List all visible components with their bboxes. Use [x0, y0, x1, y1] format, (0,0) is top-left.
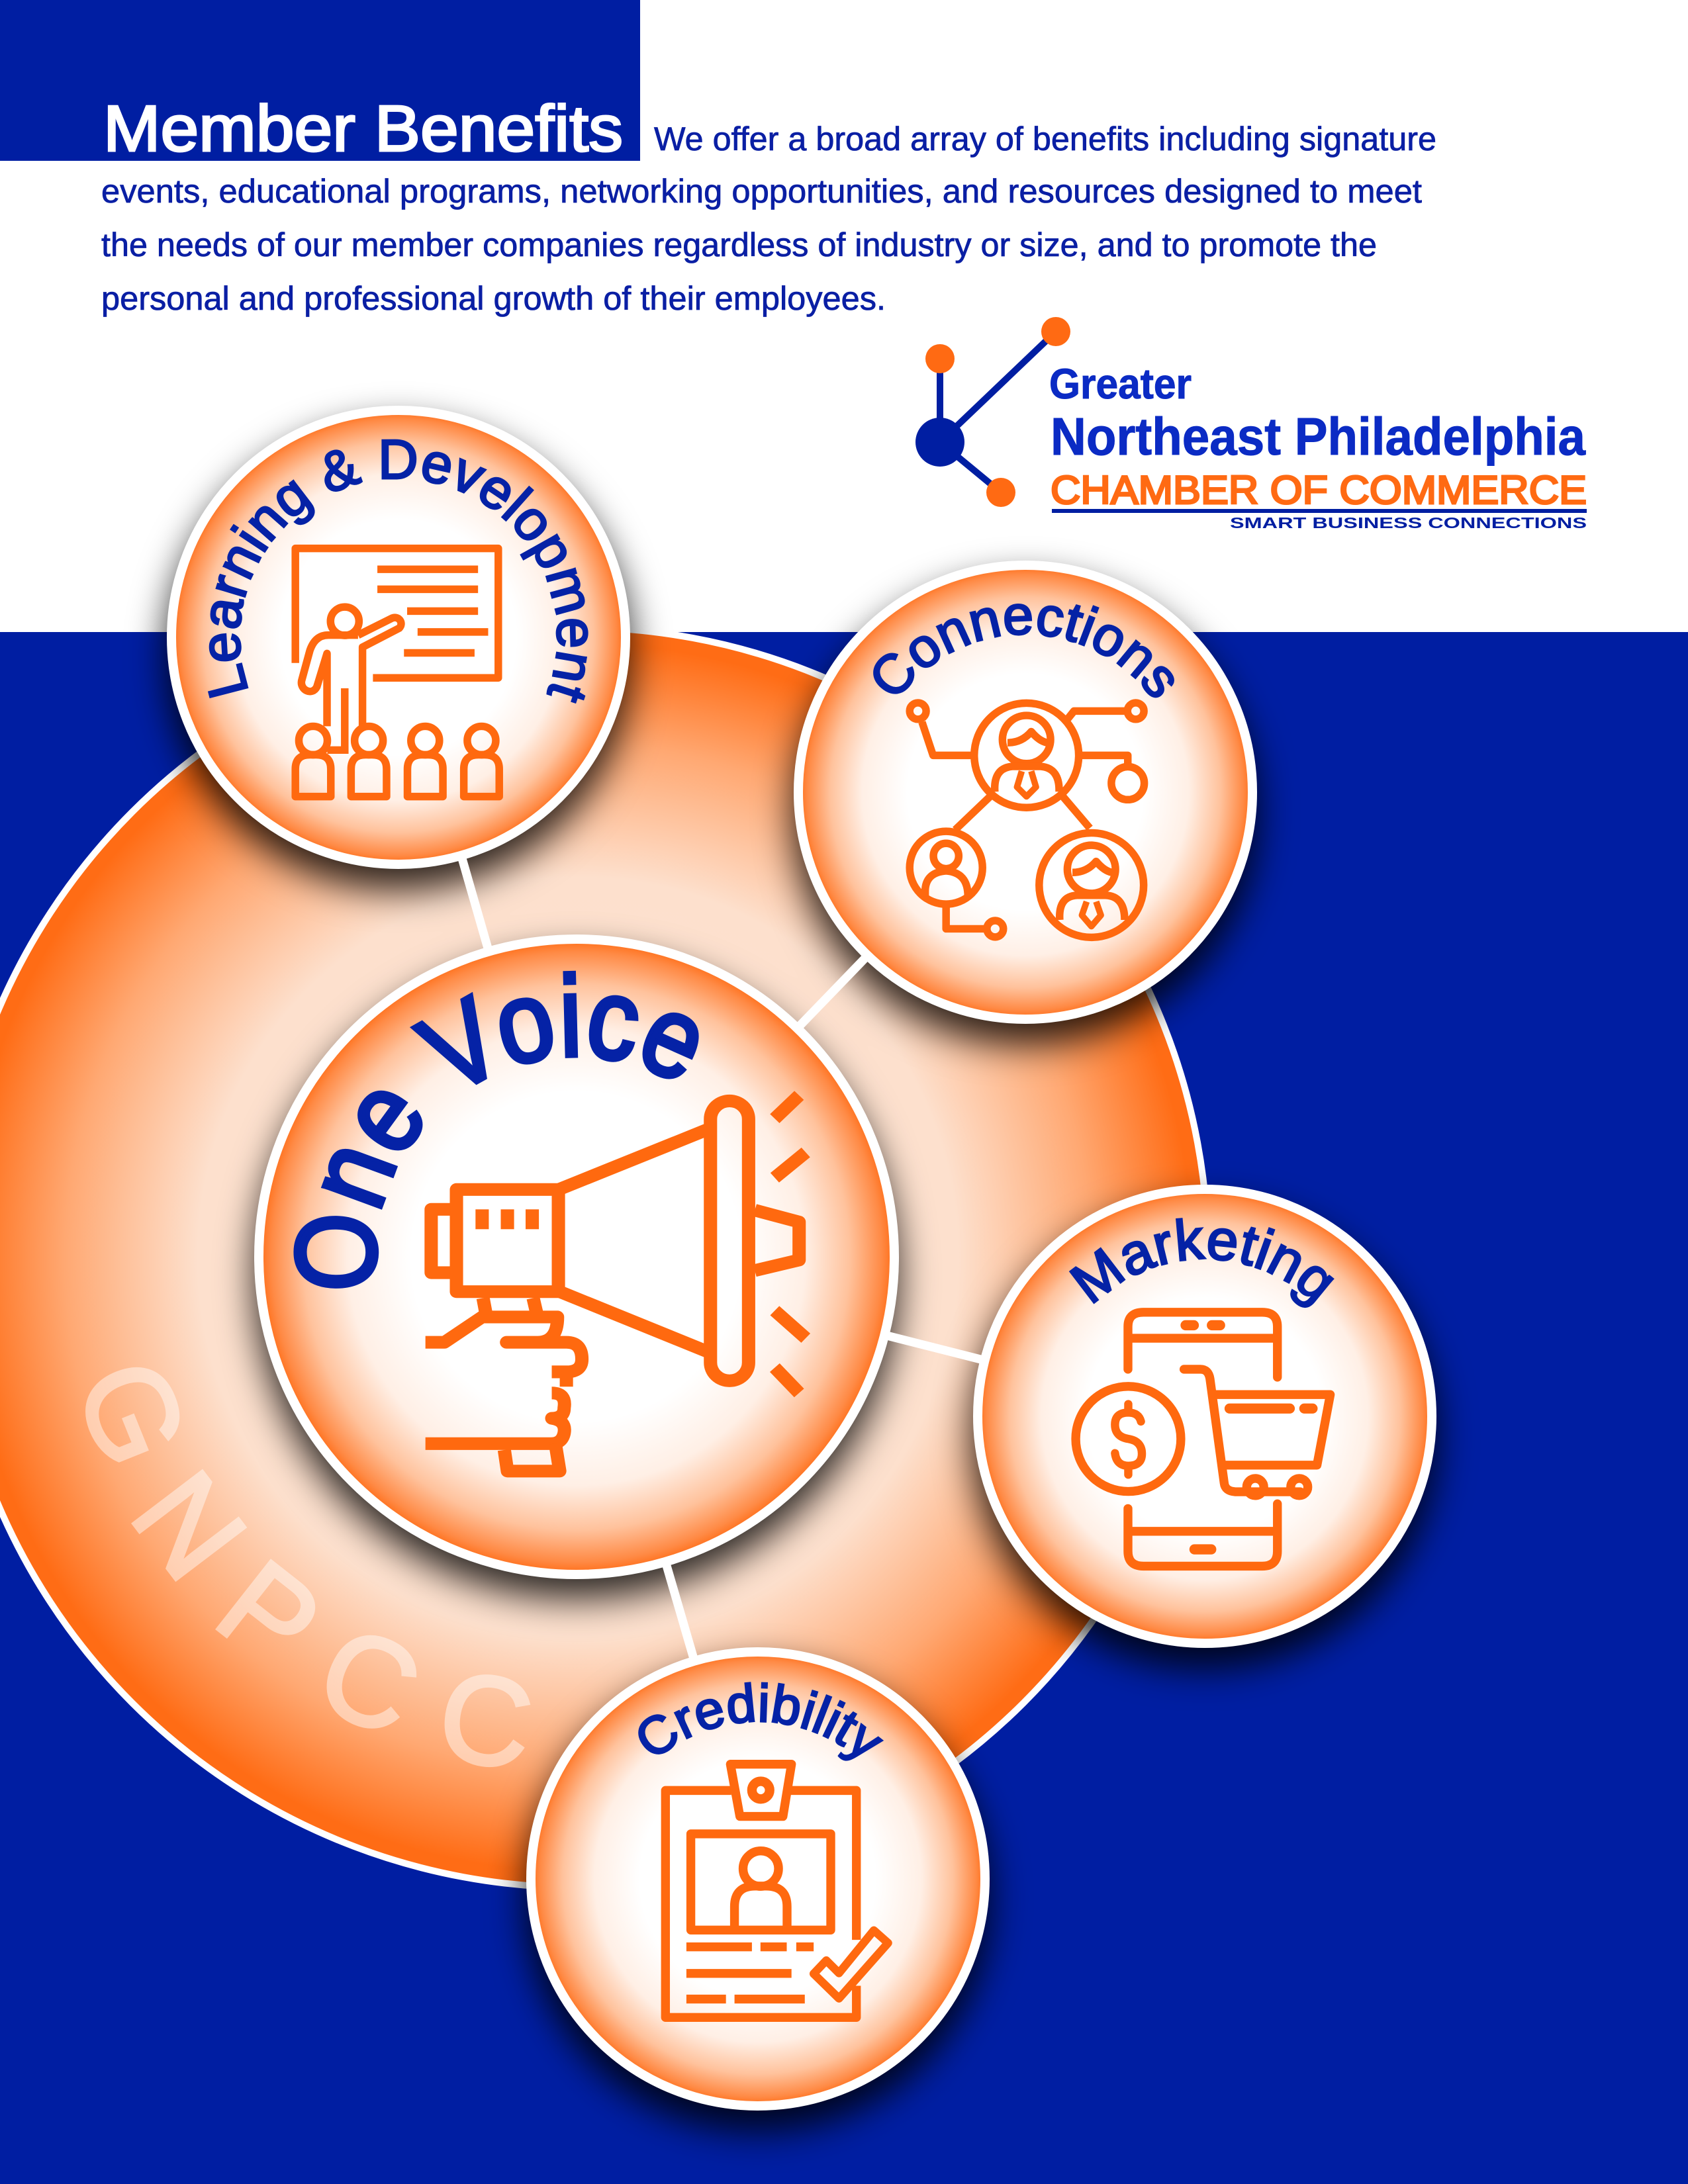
intro text block: events, educational programs, networking opportunities, and resources designed to meet [101, 173, 1422, 210]
heading: Connections: Connections [873, 604, 1174, 698]
blue background panel [0, 632, 1688, 2184]
intro text block: personal and professional growth of their employees. [101, 280, 886, 317]
large background circle [0, 627, 1208, 1888]
heading: Credibility: Credibility [638, 1682, 884, 1761]
logo: Greater Northeast Philadelphia Chamber of Commerce [915, 317, 1587, 531]
heading: Learning & Development: Learning & Development [208, 439, 588, 704]
panel: Connections [794, 561, 1257, 1024]
logo: Greater Northeast Philadelphia Chamber of Commerce: Northeast Philadelphia [1051, 407, 1585, 466]
heading: Marketing: Marketing [1068, 1218, 1335, 1308]
icon: ID badge with check [665, 1764, 888, 2017]
icon: megaphone in hand [426, 1095, 806, 1471]
panel: Learning & Development [167, 406, 630, 869]
icon: presenter and audience [295, 549, 499, 797]
icon: phone, coin and cart [1076, 1312, 1331, 1566]
panel: Credibility [526, 1647, 990, 2111]
intro text block [101, 120, 1436, 317]
watermark: GNPCC: GNPCC [85, 1367, 531, 1767]
circle shadows [165, 424, 1438, 2132]
title: Member Benefits: Member Benefits [103, 92, 623, 165]
intro text block: the needs of our member companies regardless of industry or size, and to promote the [101, 226, 1377, 263]
panel: Marketing [973, 1185, 1436, 1648]
logo: Greater Northeast Philadelphia Chamber of Commerce: CHAMBER OF COMMERCE [1051, 468, 1587, 512]
title block background [0, 0, 640, 161]
heading: One Voice: One Voice [293, 970, 699, 1289]
panel: One Voice [254, 934, 899, 1579]
logo: Greater Northeast Philadelphia Chamber of Commerce: Greater [1049, 360, 1192, 408]
logo: Greater Northeast Philadelphia Chamber of Commerce: SMART BUSINESS CONNECTIONS [1230, 514, 1587, 531]
connector lines [399, 637, 1205, 1879]
icon: people network [910, 703, 1145, 937]
intro text block: We offer a broad array of benefits including signature [654, 120, 1436, 158]
